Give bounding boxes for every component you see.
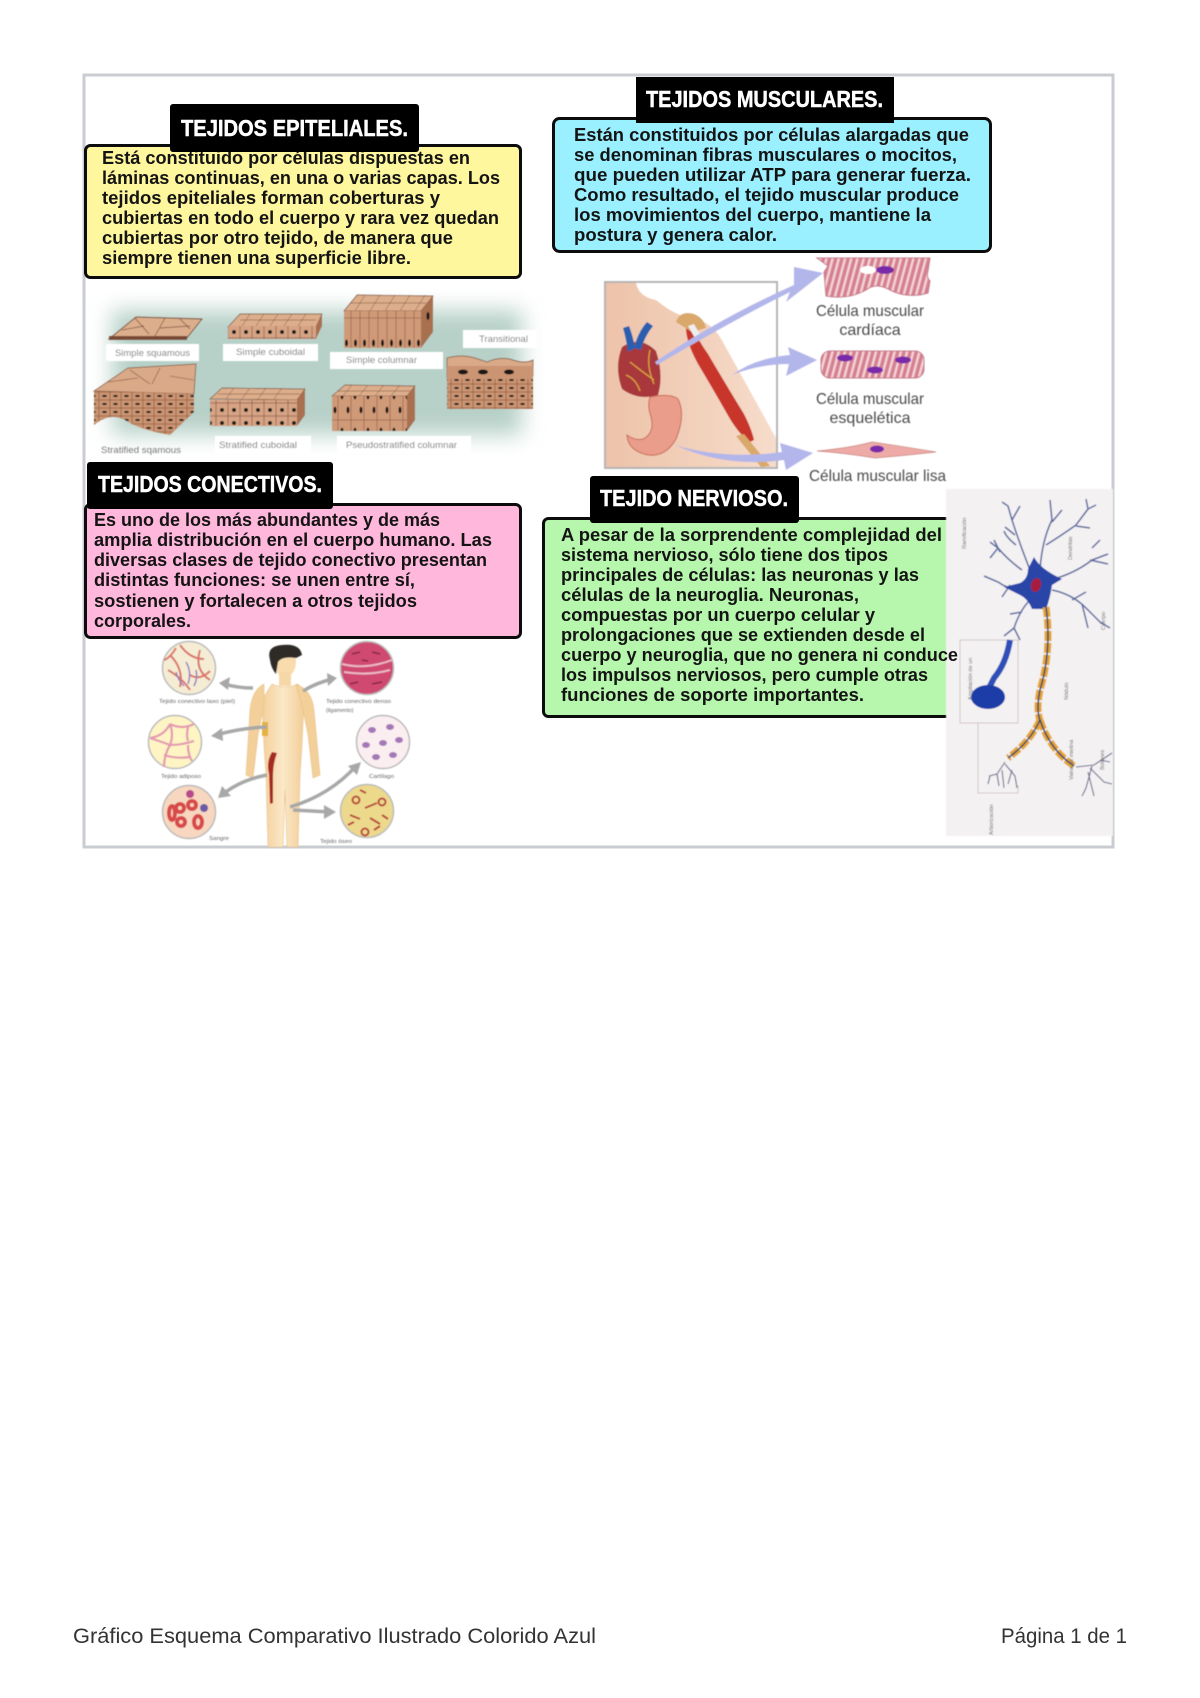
small rotated labels bbox=[962, 518, 1107, 835]
tissue circle: cartilage bbox=[356, 716, 410, 780]
small rotated labels: Botones bbox=[1100, 750, 1106, 770]
label: skeletal bbox=[816, 391, 925, 427]
musculares body text: los movimientos del cuerpo, mantiene la bbox=[574, 205, 932, 225]
epiteliales body text: siempre tienen una superficie libre. bbox=[102, 248, 411, 268]
dendrites bbox=[984, 499, 1110, 640]
simple squamous bbox=[106, 317, 202, 361]
icon: heart bbox=[618, 322, 661, 397]
small rotated labels: Vaina de mielina bbox=[1069, 739, 1075, 780]
stratified cuboidal bbox=[210, 388, 311, 453]
tissue circle: dense connective: (ligamento) bbox=[326, 708, 354, 714]
stratified cuboidal: Stratified cuboidal bbox=[219, 440, 297, 451]
conectivos body text: Es uno de los más abundantes y de más bbox=[94, 510, 440, 530]
small rotated labels: Nódulo bbox=[1064, 683, 1070, 700]
musculares body text: Como resultado, el tejido muscular produce bbox=[574, 185, 959, 205]
nucleus bbox=[1029, 577, 1043, 593]
conectivos body text: sostienen y fortalecen a otros tejidos bbox=[94, 591, 417, 611]
conectivos body text: distintas funciones: se unen entre sí, bbox=[94, 570, 415, 590]
tejido nervioso body text bbox=[561, 525, 958, 705]
tissue circle: bone: Tejido óseo bbox=[320, 839, 352, 845]
musculares body text: que pueden utilizar ATP para generar fuerza. bbox=[574, 165, 971, 185]
epiteliales text box bbox=[86, 146, 520, 278]
label: skeletal: esquelética bbox=[830, 410, 911, 427]
epiteliales body text: cubiertas en todo el cuerpo y rara vez quedan bbox=[102, 208, 499, 228]
outer frame bbox=[84, 75, 1113, 847]
epiteliales body text bbox=[102, 148, 500, 268]
musculares body text: postura y genera calor. bbox=[574, 225, 777, 245]
axon terminals bbox=[988, 753, 1112, 796]
musculares heading bbox=[636, 77, 894, 123]
small rotated labels: Ramificación bbox=[962, 518, 968, 549]
tissue circle: loose connective: Tejido conectivo laxo (piel) bbox=[159, 699, 235, 705]
conectivos heading bbox=[87, 462, 333, 509]
tejido nervioso body text: sistema nervioso, sólo tiene dos tipos bbox=[561, 545, 888, 565]
tissue circle: blood bbox=[162, 786, 229, 842]
tejido nervioso body text: A pesar de la sorprendente complejidad del bbox=[561, 525, 942, 545]
tissue circle: dense connective: Tejido conectivo denso bbox=[326, 699, 391, 705]
soma bbox=[1004, 557, 1062, 609]
stratified squamous: Stratified sqamous bbox=[101, 445, 181, 456]
icon: arm muscle bbox=[676, 313, 770, 467]
inset synapse bbox=[960, 640, 1018, 723]
footer page number: Página 1 de 1 bbox=[1001, 1625, 1127, 1648]
conectivos body text: diversas clases de tejido conectivo presentan bbox=[94, 550, 487, 570]
icon: stomach bbox=[627, 395, 682, 455]
epiteliales body text: Está constituido por células dispuestas en bbox=[102, 148, 470, 168]
label: cardiac: cardíaca bbox=[839, 322, 901, 339]
arrow heads bbox=[211, 673, 361, 819]
tejido nervioso body text: prolongaciones que se extienden desde el bbox=[561, 625, 925, 645]
tejido nervioso body text: células de la neuroglia. Neuronas, bbox=[561, 585, 859, 605]
tissue circle: adipose bbox=[148, 716, 202, 780]
small rotated labels: Cuerpo bbox=[1101, 612, 1107, 630]
conectivos body text: corporales. bbox=[94, 611, 191, 631]
panel: tejido nervioso box bbox=[544, 518, 1024, 716]
musculares text box bbox=[554, 118, 990, 252]
panel: tejidos conectivos bbox=[86, 462, 520, 638]
tissue circle: cartilage: Cartílago bbox=[369, 774, 394, 780]
tissue circle: bone bbox=[320, 784, 394, 845]
tejido nervioso heading: TEJIDO NERVIOSO. bbox=[600, 485, 788, 511]
tejido nervioso body text: funciones de soporte importantes. bbox=[561, 685, 864, 705]
conectivos body text: amplia distribución en el cuerpo humano. Las bbox=[94, 530, 492, 550]
small rotated labels: Dendritas bbox=[1068, 536, 1074, 560]
epiteliales body text: cubiertas por otro tejido, de manera que bbox=[102, 228, 453, 248]
footer title: Gráfico Esquema Comparativo Ilustrado Colorido Azul bbox=[73, 1625, 596, 1648]
simple cuboidal: Simple cuboidal bbox=[236, 347, 305, 358]
conectivos text box bbox=[86, 504, 520, 638]
label: smooth: Célula muscular lisa bbox=[809, 468, 946, 485]
tissue circle: dense connective bbox=[326, 642, 394, 714]
musculares body text bbox=[574, 125, 971, 245]
pseudostratified columnar bbox=[332, 385, 471, 453]
lead box bbox=[978, 723, 1018, 793]
musculares body text: se denominan fibras musculares o mocitos, bbox=[574, 145, 957, 165]
tissue circle: adipose: Tejido adiposo bbox=[161, 774, 201, 780]
simple columnar: Simple columnar bbox=[346, 355, 417, 366]
tejido nervioso body text: cuerpo y neuroglia, que no genera ni conduce bbox=[561, 645, 958, 665]
chart: epithelial tissue types illustration bbox=[94, 295, 537, 456]
tejido nervioso body text: los impulsos nerviosos, pero cumple otras bbox=[561, 665, 928, 685]
musculares body text: Están constituidos por células alargadas que bbox=[574, 125, 969, 145]
label: skeletal: Célula muscular bbox=[816, 391, 925, 408]
epiteliales body text: láminas continuas, en una o varias capas. Los bbox=[102, 168, 500, 188]
chart: neuron illustration bbox=[946, 489, 1113, 836]
panel: tejidos musculares bbox=[554, 77, 990, 252]
chart: muscle tissue illustration bbox=[605, 258, 946, 485]
small rotated labels: Arborización bbox=[989, 804, 995, 835]
stratified squamous bbox=[94, 364, 196, 456]
epiteliales heading bbox=[170, 104, 419, 152]
conectivos body text bbox=[94, 510, 492, 631]
epiteliales heading: TEJIDOS EPITELIALES. bbox=[181, 115, 408, 141]
small rotated labels: Ampliación de un bbox=[968, 658, 974, 700]
panel: tejidos epiteliales bbox=[86, 104, 520, 278]
icon: smooth muscle cell bbox=[817, 442, 936, 458]
epiteliales body text: tejidos epiteliales forman coberturas y bbox=[102, 188, 440, 208]
pseudostratified columnar: Pseudostratified columnar bbox=[346, 440, 457, 451]
arrow: to cardiac cell bbox=[655, 267, 823, 365]
arrows bbox=[216, 679, 356, 812]
tissue circle: loose connective bbox=[159, 642, 235, 705]
tejido nervioso body text: compuestas por un cuerpo celular y bbox=[561, 605, 875, 625]
tejido nervioso body text: principales de células: las neuronas y las bbox=[561, 565, 919, 585]
transitional: Transitional bbox=[479, 334, 528, 345]
axon bbox=[1008, 607, 1074, 766]
human figure bbox=[246, 645, 320, 847]
transitional bbox=[447, 330, 537, 409]
arrow: to skeletal cell bbox=[732, 347, 817, 376]
icon: skeletal muscle cell bbox=[821, 351, 924, 378]
conectivos heading: TEJIDOS CONECTIVOS. bbox=[98, 471, 322, 497]
label: cardiac bbox=[816, 303, 925, 339]
tejido nervioso heading bbox=[590, 476, 799, 523]
torso picture bbox=[605, 282, 777, 468]
label: cardiac: Célula muscular bbox=[816, 303, 925, 320]
simple columnar bbox=[330, 295, 443, 369]
chart: connective tissue illustration bbox=[148, 642, 410, 847]
musculares heading: TEJIDOS MUSCULARES. bbox=[646, 86, 883, 112]
simple cuboidal bbox=[223, 314, 322, 361]
arrow: to smooth cell bbox=[675, 443, 813, 470]
simple squamous: Simple squamous bbox=[115, 348, 190, 359]
tissue circle: blood: Sangre bbox=[209, 836, 229, 842]
icon: cardiac muscle cell bbox=[817, 258, 930, 297]
